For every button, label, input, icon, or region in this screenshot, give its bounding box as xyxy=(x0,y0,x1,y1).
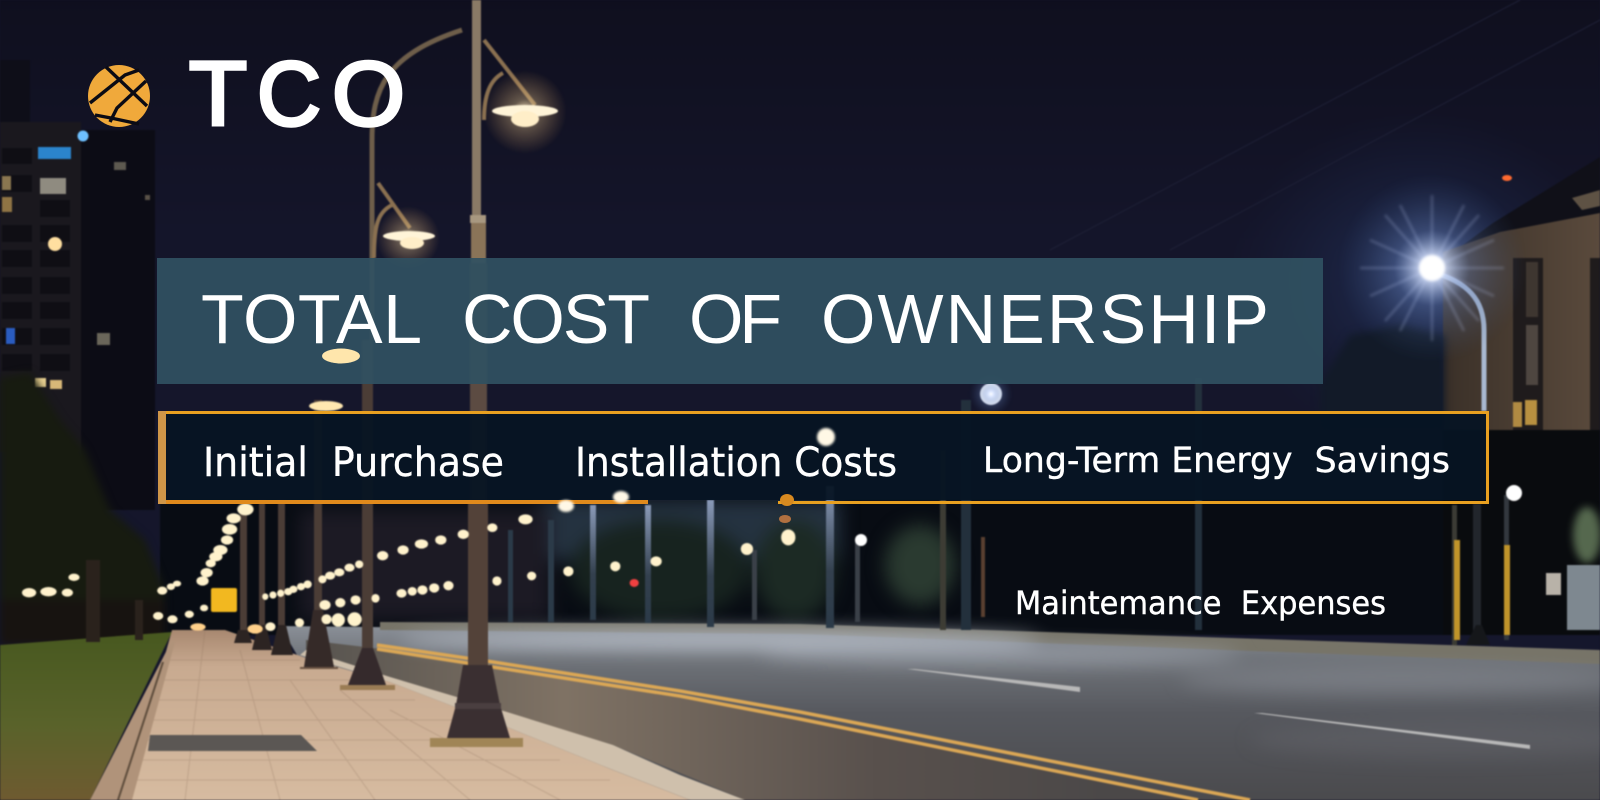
grass xyxy=(0,632,172,800)
logo text: TCO: C xyxy=(257,44,321,145)
bright white lamps lower right xyxy=(855,383,1522,546)
cost factors box xyxy=(158,411,1489,523)
thin distant poles xyxy=(508,378,1202,630)
title text: COST xyxy=(462,280,650,358)
title text: TOTAL xyxy=(201,280,422,358)
dark hill behind right lamp xyxy=(1320,325,1445,430)
distant wires xyxy=(1050,0,1600,250)
haze under the box xyxy=(300,500,955,620)
title text xyxy=(201,280,1269,358)
logo text: TCO: T xyxy=(189,44,247,144)
left apartment building xyxy=(0,60,155,510)
red beacon xyxy=(1502,175,1512,181)
road surface xyxy=(280,626,1600,800)
sidewalk xyxy=(125,630,690,800)
warm lamp glows xyxy=(309,70,567,411)
blue haze around right lamp xyxy=(1230,110,1600,450)
right tree and kiosk xyxy=(1573,507,1600,563)
kerb xyxy=(300,650,745,800)
yellow poles at right xyxy=(1452,495,1510,645)
sidewalk inner border xyxy=(90,642,175,800)
blue street lamp with arm xyxy=(1337,173,1527,645)
street light poles row xyxy=(234,340,395,690)
right building xyxy=(1440,157,1600,450)
cost factor: initial purchase: Initial Purchase xyxy=(203,440,504,486)
title text: OF xyxy=(689,280,782,358)
logo icon: orange globe xyxy=(88,65,150,127)
dark mat on sidewalk xyxy=(148,735,317,751)
white lane dashes xyxy=(907,669,1530,749)
title banner xyxy=(157,258,1323,384)
lamps overlapping the box xyxy=(558,428,835,512)
cost factor: installation costs: Installation Costs xyxy=(575,440,897,486)
cost factor: long-term energy savings: Long-Term Energy Savings xyxy=(983,441,1450,481)
yellow double line xyxy=(377,645,1250,800)
distant light dots xyxy=(22,503,795,634)
yellow roadside sign xyxy=(211,588,237,612)
logo text: TCO xyxy=(189,44,405,145)
left trees xyxy=(0,372,165,645)
title text: OWNERSHIP xyxy=(821,280,1269,358)
dark tree line behind the road xyxy=(160,500,1600,635)
second pole upper part and arm xyxy=(372,30,462,340)
road light reflection xyxy=(400,630,1600,758)
logo text: TCO: O xyxy=(332,44,405,145)
floating label: maintenance expenses: Maintemance Expenses xyxy=(1015,584,1386,622)
trunks on the left xyxy=(86,560,143,642)
main foreground lamp post xyxy=(430,0,535,747)
lamp seen through the banner xyxy=(322,348,360,364)
